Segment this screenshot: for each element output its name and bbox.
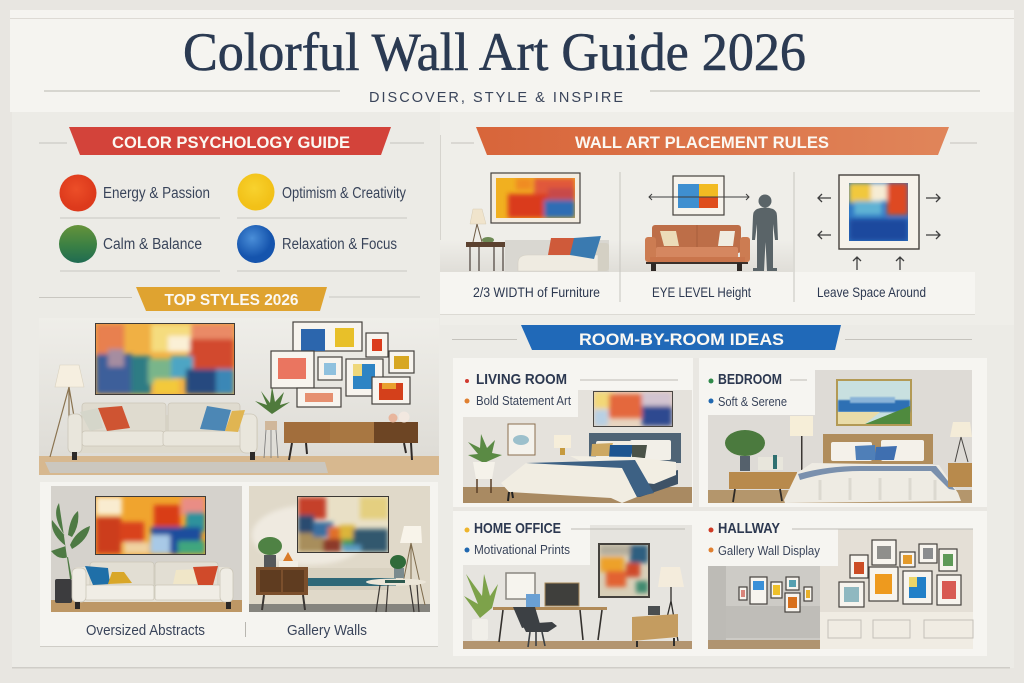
floor lamp	[790, 416, 813, 470]
lamp side table and plant	[366, 526, 426, 612]
plant on stand	[255, 386, 290, 458]
bed	[784, 434, 961, 503]
orange sofa	[645, 225, 750, 271]
table lamp	[466, 209, 509, 271]
panel: top styles 2026	[39, 287, 439, 475]
sofa and cushions	[505, 236, 609, 272]
small frame	[508, 424, 535, 455]
image: gallery walls sideboard room	[249, 486, 430, 612]
room subtitle: living room: Bold Statement Art	[476, 393, 571, 408]
room subtitle: home office: Motivational Prints	[474, 542, 570, 557]
caption: gallery walls: Gallery Walls	[287, 622, 367, 639]
bench	[308, 568, 398, 590]
title panel	[10, 10, 1014, 112]
room subtitle: bedroom: Soft & Serene	[718, 394, 787, 409]
hallway frames	[739, 540, 961, 612]
room title: hallway: HALLWAY	[718, 520, 780, 537]
card: hallway	[708, 520, 973, 649]
abstract painting	[95, 496, 206, 555]
rule 2: eye level illustration	[645, 176, 778, 271]
rule 1: two thirds width illustration	[466, 173, 609, 272]
mixed abstract painting	[297, 496, 389, 553]
swatch: calm and balance: Calm & Balance	[103, 236, 202, 253]
heading banner: color psychology	[69, 127, 391, 155]
room image: home office	[463, 525, 692, 649]
sideboard and plant	[256, 537, 308, 610]
sofa	[72, 562, 233, 609]
room image: living room	[463, 390, 692, 503]
panel: style examples	[40, 482, 438, 647]
image: oversized abstracts living room	[51, 486, 242, 612]
room title: hallway	[708, 520, 973, 537]
lamp	[554, 435, 571, 455]
landscape art	[836, 379, 912, 426]
lamp and nightstand	[948, 422, 972, 487]
card: home office	[463, 520, 692, 649]
heading banner: top styles: TOP STYLES 2026	[164, 292, 299, 309]
framed square art	[839, 175, 919, 249]
rug	[45, 462, 328, 473]
card: bedroom	[708, 370, 972, 503]
chair	[513, 607, 557, 647]
room image: hallway	[708, 529, 973, 649]
room title: home office: HOME OFFICE	[474, 520, 561, 537]
plant	[468, 434, 502, 493]
person silhouette	[752, 194, 778, 271]
heading banner: placement rules	[476, 127, 949, 155]
heading banner: room by room	[521, 325, 841, 350]
gallery wall frames	[271, 322, 414, 407]
oversized abstract painting	[95, 323, 235, 395]
room title: home office	[464, 520, 685, 537]
wood console	[284, 412, 418, 460]
swatch: optimism and creativity: Optimism & Creativity	[282, 185, 406, 202]
desk with monitor	[493, 583, 607, 642]
plant and dresser	[725, 430, 797, 502]
heading banner: color psychology: COLOR PSYCHOLOGY GUIDE	[112, 134, 350, 152]
sofa	[68, 403, 258, 460]
plant with dark pot	[51, 503, 90, 603]
card: living room	[463, 371, 692, 503]
hero scene: living room with abstract and gallery wall	[39, 318, 439, 475]
abstract art	[593, 391, 673, 427]
floor lamp	[50, 365, 84, 457]
framed art with eye line	[649, 176, 749, 215]
swatch: relaxation and focus	[237, 225, 397, 263]
room title: bedroom: BEDROOM	[718, 371, 782, 388]
swatch: energy and passion	[60, 174, 210, 212]
swatch: energy and passion: Energy & Passion	[103, 185, 210, 202]
caption: two thirds width: 2/3 WIDTH of Furniture	[473, 284, 600, 300]
spacing arrows	[818, 194, 940, 270]
abstract art	[598, 543, 650, 598]
heading banner: room by room: ROOM-BY-ROOM IDEAS	[579, 331, 784, 349]
lamp	[658, 567, 684, 641]
bed	[501, 433, 681, 503]
caption: leave space: Leave Space Around	[817, 284, 926, 300]
framed art	[491, 173, 580, 223]
room title: living room	[465, 371, 678, 388]
panel: room by room ideas	[452, 325, 987, 656]
wall frame	[506, 573, 535, 599]
swatch: optimism and creativity	[238, 174, 406, 210]
room image: bedroom	[708, 370, 972, 503]
panel: wall art placement rules	[440, 112, 1014, 325]
rule 3: leave space around illustration	[818, 175, 940, 270]
swatch: calm and balance	[59, 225, 202, 263]
room subtitle: hallway: Gallery Wall Display	[718, 543, 820, 558]
subtitle: DISCOVER, STYLE & INSPIRE	[369, 90, 623, 106]
title: Colorful Wall Art Guide 2026	[183, 22, 806, 82]
heading banner: placement rules: WALL ART PLACEMENT RULES	[575, 134, 829, 152]
caption: eye level: EYE LEVEL Height	[652, 284, 751, 300]
plant	[464, 574, 498, 640]
caption: oversized abstracts: Oversized Abstracts	[86, 622, 205, 639]
panel: color psychology guide	[39, 127, 424, 272]
swatch: relaxation and focus: Relaxation & Focus	[282, 236, 397, 253]
heading banner: top styles	[136, 287, 327, 311]
room title: living room: LIVING ROOM	[476, 371, 567, 388]
nightstand	[632, 606, 678, 647]
